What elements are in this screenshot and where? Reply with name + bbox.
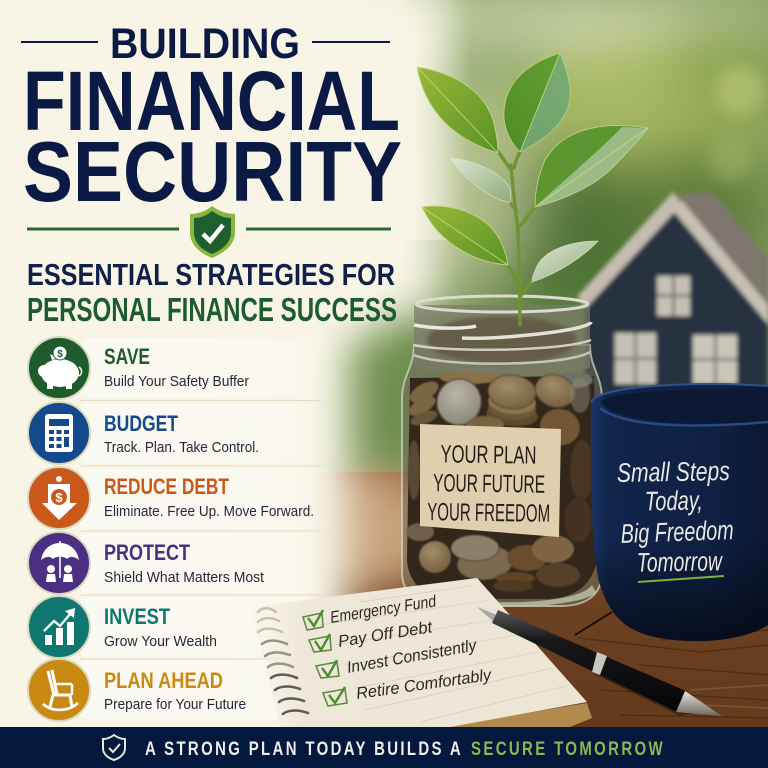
house left window (615, 333, 656, 384)
blurred garden background (318, 0, 768, 472)
stem (497, 150, 536, 325)
item: protect (28, 532, 265, 594)
icon: piggy bank (28, 337, 90, 399)
jar body (402, 345, 602, 606)
leaf small left (450, 158, 510, 203)
leaf lower left (422, 206, 508, 265)
subtitle line 1: ESSENTIAL STRATEGIES FOR (27, 257, 395, 292)
label text: YOUR FREEDOM (427, 498, 550, 528)
list rows background (78, 338, 336, 720)
subtitle line 2: PERSONAL FINANCE SUCCESS (27, 291, 397, 328)
mug handwritten message: Today, (645, 485, 703, 517)
leaf lower right (532, 241, 598, 282)
house right window (693, 335, 737, 384)
item: budget (28, 402, 259, 464)
checklist text: Pay Off Debt (337, 618, 435, 651)
checkbox invest (316, 660, 339, 678)
building: BUILDING (110, 20, 300, 68)
pen (477, 607, 722, 716)
icon: footer shield (103, 735, 125, 760)
mug opening (601, 390, 768, 424)
plan ahead heading: PLAN AHEAD (104, 668, 223, 693)
invest description: Grow Your Wealth (104, 633, 217, 650)
jar label (420, 424, 561, 537)
icon: rocking chair (28, 659, 90, 721)
leaf right (535, 126, 648, 207)
mug handwritten message: Small Steps (617, 456, 730, 488)
footer banner (0, 727, 768, 768)
checkbox pay off debt (309, 634, 331, 652)
glass jar with coins (402, 296, 602, 607)
item: plan ahead (28, 659, 246, 721)
checklist text: Invest Consistently (346, 636, 479, 677)
seedling plant (417, 53, 648, 325)
notebook page (250, 578, 587, 727)
invest heading: INVEST (104, 604, 170, 629)
mug handwritten message: Tomorrow (637, 546, 723, 578)
security: SECURITY (23, 125, 402, 220)
label text: YOUR PLAN (440, 440, 537, 470)
mug underline (638, 576, 724, 582)
protect description: Shield What Matters Most (104, 569, 265, 586)
checklist (303, 592, 494, 706)
coin mass (407, 376, 597, 599)
checkbox retire (323, 687, 347, 706)
icon: shield check (190, 206, 235, 258)
leaf top left (417, 67, 498, 153)
cream left panel fade (0, 0, 470, 727)
leaf veins (417, 53, 648, 265)
checklist text: Emergency Fund (329, 592, 438, 627)
title (21, 20, 402, 220)
subtitle (27, 257, 397, 328)
budget heading: BUDGET (104, 411, 178, 436)
notebook ruled lines (320, 586, 570, 722)
icon: debt arrow down: $ (55, 490, 63, 505)
icon: piggy bank: $ (57, 349, 63, 360)
notebook cover edge (440, 703, 592, 727)
item: save (28, 337, 249, 399)
protect heading: PROTECT (104, 540, 190, 565)
checklist text: Retire Comfortably (355, 666, 494, 703)
save description: Build Your Safety Buffer (104, 373, 249, 390)
plan ahead description: Prepare for Your Future (104, 696, 246, 713)
item: invest (28, 596, 217, 658)
icon: calculator (28, 402, 90, 464)
mug body (591, 384, 768, 641)
jar neck and threads (414, 296, 591, 373)
blurred toy house (577, 192, 768, 400)
wooden table (250, 470, 768, 727)
checklist text (329, 592, 494, 703)
label text: YOUR FUTURE (433, 469, 545, 499)
spiral notebook (250, 578, 592, 727)
footer highlight text: SECURE TOMORROW (471, 739, 665, 760)
save heading: SAVE (104, 344, 150, 369)
footer text: A STRONG PLAN TODAY BUILDS A (145, 739, 463, 760)
label text (427, 440, 551, 528)
title rules (21, 41, 390, 43)
house upper window (657, 276, 690, 316)
reduce debt heading: REDUCE DEBT (104, 474, 229, 499)
green divider with shield (27, 206, 391, 258)
checkbox emergency fund (303, 610, 323, 630)
financial: FINANCIAL (23, 54, 400, 148)
item: reduce debt (28, 467, 314, 529)
budget description: Track. Plan. Take Control. (104, 439, 259, 456)
navy coffee mug (591, 384, 768, 641)
reduce debt description: Eliminate. Free Up. Move Forward. (104, 503, 314, 520)
mug handwritten message (617, 456, 734, 578)
icon: umbrella and family (28, 532, 90, 594)
icon: growth chart (28, 596, 90, 658)
icon: debt arrow down (28, 467, 90, 529)
jar glass base (410, 585, 596, 607)
leaf top middle (504, 53, 570, 152)
notebook spiral binding (258, 608, 308, 714)
individual coins (406, 370, 594, 592)
